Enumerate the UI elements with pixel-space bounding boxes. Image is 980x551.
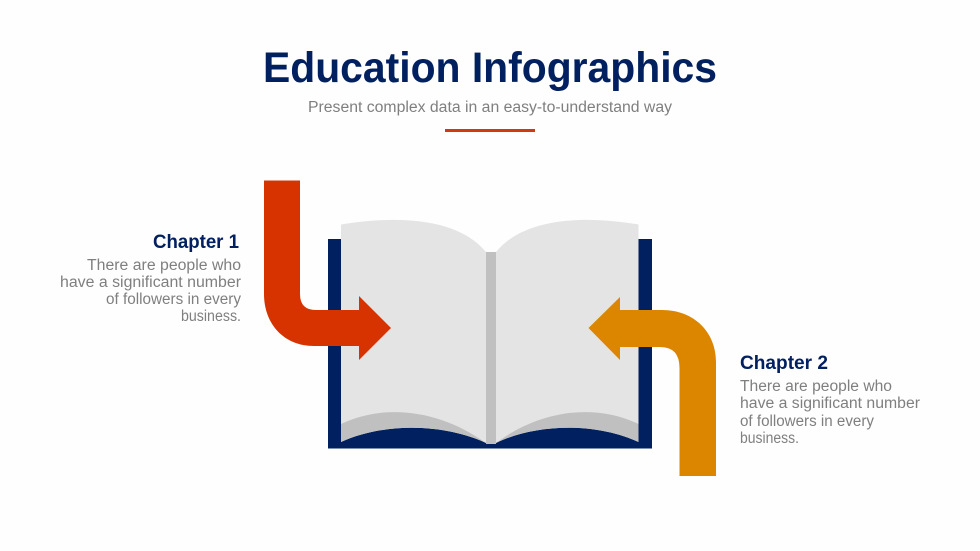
arrow: red, chapter 1 (264, 180, 391, 360)
chapter 2 description: business. (740, 430, 799, 447)
subtitle: Present complex data in an easy-to-understand way (308, 99, 672, 116)
text block: chapter 2 (740, 352, 920, 447)
book cover (328, 239, 652, 448)
chapter 1 heading: Chapter 1 (153, 231, 239, 253)
arrow: orange, chapter 2 (588, 297, 716, 476)
chapter 1 description (60, 257, 241, 325)
chapter 2 description: There are people who (740, 378, 892, 395)
text block: chapter 1 (60, 231, 241, 325)
chapter 2 description: have a significant number (740, 395, 920, 412)
right page (496, 220, 638, 443)
title: Education Infographics (263, 44, 717, 92)
chapter 1 description: There are people who (87, 257, 241, 274)
title underline (445, 129, 535, 132)
left page (341, 220, 486, 443)
chapter 2 description (740, 378, 920, 447)
header (263, 44, 717, 132)
icon: open book (328, 220, 652, 448)
chapter 2 heading: Chapter 2 (740, 352, 828, 374)
book spine (486, 252, 496, 444)
left page curl (341, 412, 486, 443)
right page curl (496, 412, 638, 443)
chapter 1 description: have a significant number (60, 274, 241, 291)
chapter 1 description: of followers in every (106, 291, 241, 308)
chapter 2 description: of followers in every (740, 413, 874, 430)
chapter 1 description: business. (181, 308, 241, 325)
